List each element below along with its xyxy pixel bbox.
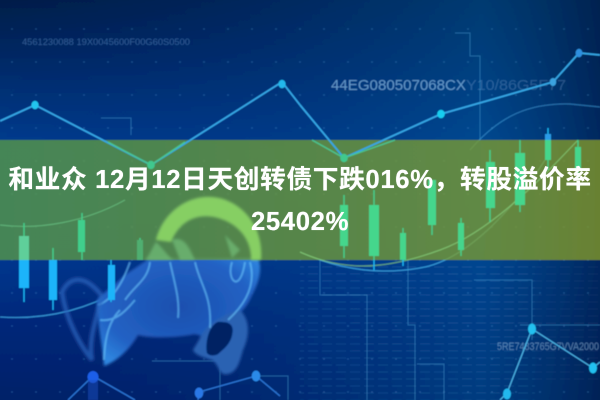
lower trend curve [0, 160, 545, 318]
circuit outlines [101, 33, 600, 400]
faint data text: top left: 4561230088 19X0045600F00G60S0500 [22, 37, 190, 48]
candlesticks [19, 128, 581, 310]
title [8, 166, 592, 236]
main trend line [0, 49, 600, 266]
globe shape [62, 258, 260, 374]
title: 和业众 12月12日天创转债下跌016%，转股溢价率 [8, 166, 592, 194]
green band [0, 140, 600, 260]
globe top in band [145, 197, 261, 260]
faint data text: top right: 44EG080507068CX [331, 78, 466, 94]
title: 25402% [251, 208, 349, 236]
background artwork: Y10/86G5F77 [466, 78, 566, 94]
bottom network lines [68, 324, 600, 400]
